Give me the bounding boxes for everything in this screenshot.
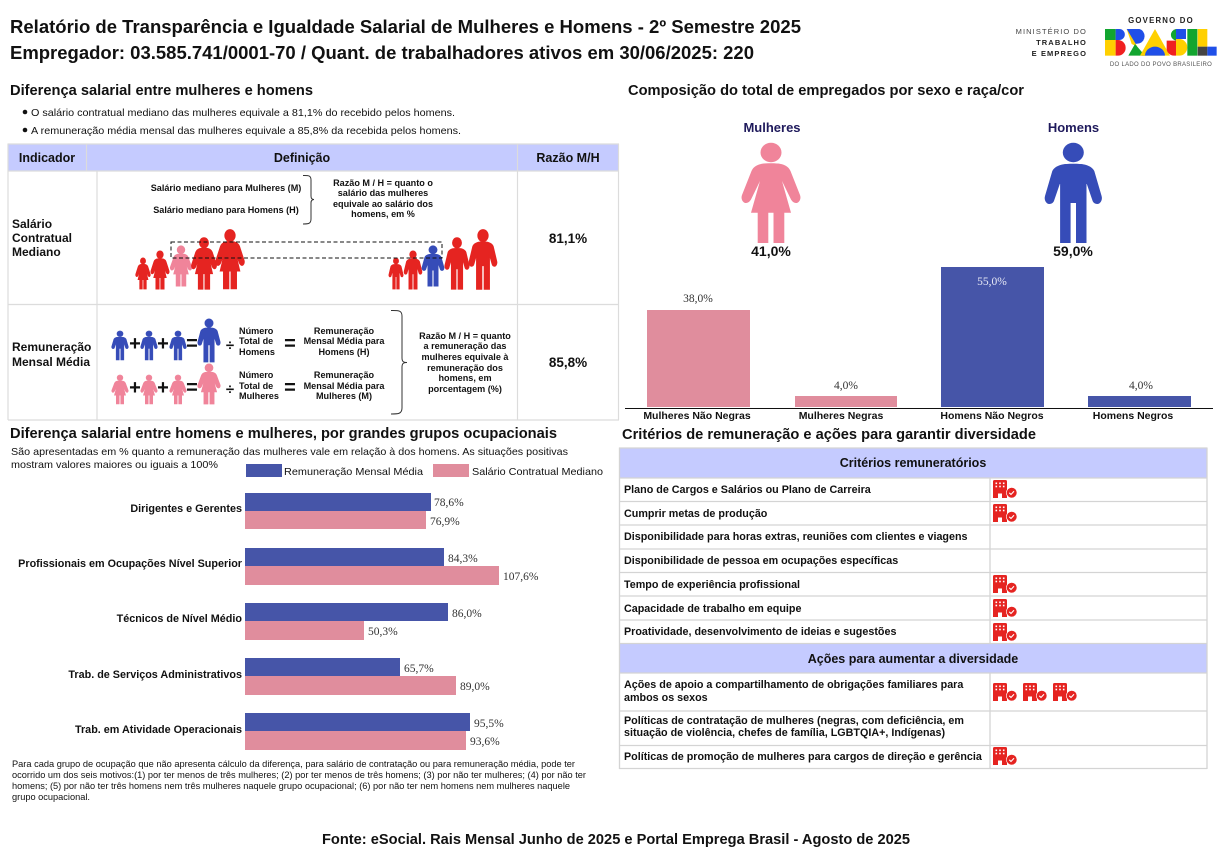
icons: company adopts criterion — [993, 480, 1077, 765]
formula: average pay for men: Homens — [239, 347, 275, 357]
title: Relatório de Transparência e Igualdade Salarial de Mulheres e Homens - 2º Semestre 2025 — [10, 16, 801, 37]
formula: average pay for women: Mulheres — [239, 391, 279, 401]
formula: average pay for men: = — [186, 333, 198, 355]
logo: Ministério do Trabalho e Emprego: E EMPREGO — [1032, 49, 1087, 58]
formula: average pay for women: Mulheres (M) — [316, 391, 372, 401]
formula: average pay for men: Total de — [239, 336, 273, 346]
bar chart: composição por sexo e raça: 4,0% — [834, 380, 858, 392]
formula: average pay for men: + — [157, 333, 169, 355]
table header: Indicador — [19, 151, 75, 165]
legend: Remuneração Mensal Média — [284, 466, 423, 478]
row label: salário contratual mediano: Salário — [12, 217, 52, 231]
formula: average pay for women: Total de — [239, 381, 273, 391]
bar chart: composição por sexo e raça: Homens Não Negros — [940, 410, 1044, 422]
bracket and explanation: remuneração: Razão M / H = quanto — [419, 331, 511, 341]
bar chart: composição por sexo e raça: Homens Negros — [1093, 410, 1173, 422]
heading: critérios de remuneração: Critérios de remuneração e ações para garantir diversidade — [622, 427, 1036, 443]
footnote: homens; (5) por não ter três homens nem três mulheres naquele grupo ocupacional; (6) por não ter nem homens nem mulheres naquele — [12, 781, 570, 791]
panel: criteria table — [619, 448, 1207, 769]
panel: indicator table — [8, 144, 619, 420]
formula: average pay for women: Remuneração — [314, 370, 375, 380]
definition text: salário mediano: Razão M / H = quanto o — [333, 178, 433, 188]
criteria rows — [624, 484, 968, 638]
formula: average pay for men: Remuneração — [314, 326, 375, 336]
footnote — [12, 759, 586, 802]
table header: Razão M/H — [536, 151, 600, 165]
group: Trab. em Atividade Operacionais: 93,6% — [470, 736, 500, 748]
icon group: women ordered by salary — [136, 230, 244, 289]
group: Dirigentes e Gerentes: 76,9% — [430, 516, 460, 528]
source footer: Fonte: eSocial. Rais Mensal Junho de 2025 e Portal Emprega Brasil - Agosto de 2025 — [322, 832, 910, 848]
bar chart: composição por sexo e raça: 4,0% — [1129, 380, 1153, 392]
formula: average pay for men: = — [284, 333, 296, 355]
bracket and explanation: remuneração: remuneração dos — [427, 363, 503, 373]
heading: composição: Composição do total de empregados por sexo e raça/cor — [628, 83, 1024, 99]
heading: diferença salarial: Diferença salarial entre mulheres e homens — [10, 83, 313, 99]
formula: average pay for women — [112, 364, 385, 404]
bar chart: composição por sexo e raça — [625, 267, 1213, 422]
group: Trab. de Serviços Administrativos: 65,7% — [404, 663, 434, 675]
definition text: salário mediano — [151, 175, 433, 224]
formula: average pay for women: ÷ — [226, 381, 234, 398]
bullet list: key findings: A remuneração média mensal das mulheres equivale a 85,8% da recebida pelos homens. — [31, 125, 461, 137]
bar chart: grupos ocupacionais — [18, 493, 539, 750]
formula: average pay for men: ÷ — [226, 337, 234, 354]
logo: Ministério do Trabalho e Emprego: TRABALHO — [1036, 38, 1087, 47]
logo: Ministério do Trabalho e Emprego: MINISTÉRIO DO — [1016, 27, 1087, 36]
subtitle text: São apresentadas em % quanto a remuneração das mulheres vale em relação à dos homens. As situações positivas — [11, 446, 568, 458]
median dashed box — [171, 242, 442, 258]
group: Trab. de Serviços Administrativos — [68, 658, 490, 695]
formula: average pay for women: Mensal Média para — [304, 381, 385, 391]
group: Trab. em Atividade Operacionais: 95,5% — [474, 718, 504, 730]
formula: average pay for women: + — [157, 377, 169, 399]
criteria rows: Disponibilidade de pessoa em ocupações específicas — [624, 555, 898, 567]
logo: Ministério do Trabalho e Emprego — [1016, 27, 1087, 58]
criteria rows: Plano de Cargos e Salários ou Plano de Carreira — [624, 484, 872, 496]
group: Técnicos de Nível Médio: Técnicos de Nível Médio — [117, 613, 242, 625]
footnote: grupo ocupacional. — [12, 792, 90, 802]
definition text: salário mediano: salário das mulheres — [338, 188, 428, 198]
bracket and explanation: remuneração: mulheres equivale à — [422, 352, 509, 362]
table header: Definição — [274, 151, 330, 165]
section header: ações para aumentar a diversidade: Ações para aumentar a diversidade — [808, 652, 1018, 666]
section header: critérios remuneratórios: Critérios remuneratórios — [840, 456, 986, 470]
pictogram: mulheres 41,0%: Mulheres — [743, 120, 801, 135]
group: Dirigentes e Gerentes — [130, 493, 464, 529]
group: Profissionais em Ocupações Nível Superior — [18, 548, 539, 585]
heading: diferença por grupos ocupacionais: Diferença salarial entre homens e mulheres, por grandes grupos ocupacionais — [10, 426, 557, 442]
subtitle text: mostram valores maiores ou iguais a 100% — [11, 459, 218, 471]
value: 85,8%: 85,8% — [549, 355, 587, 370]
bar chart: composição por sexo e raça: 55,0% — [977, 276, 1007, 288]
pictogram: homens 59,0%: 59,0% — [1053, 243, 1093, 259]
bracket and explanation: remuneração — [391, 310, 511, 414]
title — [10, 16, 801, 63]
formula: average pay for men: Número — [239, 326, 274, 336]
pictogram: mulheres 41,0% — [742, 120, 801, 259]
value: 81,1%: 81,1% — [549, 231, 587, 246]
pictogram: homens 59,0% — [1045, 120, 1102, 259]
criteria rows: Cumprir metas de produção — [624, 508, 768, 520]
definition text: salário mediano: equivale ao salário dos — [333, 199, 433, 209]
criteria rows: Capacidade de trabalho em equipe — [624, 603, 801, 615]
group: Profissionais em Ocupações Nível Superior: 84,3% — [448, 553, 478, 565]
formula: average pay for women: + — [129, 377, 141, 399]
bullet list: key findings — [23, 107, 461, 137]
group: Dirigentes e Gerentes: 78,6% — [434, 497, 464, 509]
definition text: salário mediano: Salário mediano para Homens (H) — [153, 205, 299, 215]
action rows: Políticas de contratação de mulheres (negras, com deficiência, em — [624, 715, 964, 727]
formula: average pay for women: Número — [239, 370, 274, 380]
formula: average pay for men: Mensal Média para — [304, 336, 385, 346]
title: Empregador: 03.585.741/0001-70 / Quant. de trabalhadores ativos em 30/06/2025: 220 — [10, 42, 754, 63]
action rows: Políticas de promoção de mulheres para cargos de direção e gerência — [624, 751, 983, 763]
icon group: men ordered by salary — [389, 230, 497, 289]
pictogram: mulheres 41,0%: 41,0% — [751, 243, 791, 259]
group: Profissionais em Ocupações Nível Superior: 107,6% — [503, 571, 539, 583]
table header — [19, 151, 600, 165]
action rows: Ações de apoio a compartilhamento de obrigações familiares para — [624, 679, 964, 691]
formula: average pay for women: = — [186, 377, 198, 399]
action rows: ambos os sexos — [624, 692, 708, 704]
group: Dirigentes e Gerentes: Dirigentes e Gerentes — [130, 503, 242, 515]
pictogram: homens 59,0%: Homens — [1048, 120, 1099, 135]
bracket and explanation: remuneração: a remuneração das — [424, 341, 506, 351]
group: Profissionais em Ocupações Nível Superior: Profissionais em Ocupações Nível Superior — [18, 558, 243, 570]
footnote: Para cada grupo de ocupação que não apresenta cálculo da diferença, para salário de contratação ou para remuneração média, pode ter — [12, 759, 575, 769]
legend — [246, 464, 603, 478]
subtitle text — [11, 446, 568, 471]
group: Trab. em Atividade Operacionais: Trab. em Atividade Operacionais — [75, 724, 242, 736]
row label: remuneração mensal média — [12, 340, 91, 369]
logo: Governo do Brasil: GOVERNO DO — [1128, 16, 1194, 25]
formula: average pay for men: Homens (H) — [318, 347, 370, 357]
formula: average pay for men — [112, 319, 385, 362]
bullet list: key findings: O salário contratual mediano das mulheres equivale a 81,1% do recebido pelos homens. — [31, 107, 455, 119]
group: Trab. de Serviços Administrativos: 89,0% — [460, 681, 490, 693]
group: Trab. de Serviços Administrativos: Trab. de Serviços Administrativos — [68, 669, 242, 681]
formula: average pay for men: + — [129, 333, 141, 355]
logo: Governo do Brasil — [1105, 16, 1217, 68]
group: Técnicos de Nível Médio: 50,3% — [368, 626, 398, 638]
row label: salário contratual mediano: Mediano — [12, 245, 61, 259]
group: Trab. em Atividade Operacionais — [75, 713, 504, 750]
definition text: salário mediano: Salário mediano para Mulheres (M) — [151, 183, 301, 193]
criteria rows: Disponibilidade para horas extras, reuniões com clientes e viagens — [624, 531, 968, 543]
bar chart: composição por sexo e raça: Mulheres Não Negras — [643, 410, 751, 422]
footnote: ocorrido um dos seis motivos:(1) por ter menos de três mulheres; (2) por ter menos de três homens; (3) por não ter mulheres; (4) por não ter — [12, 770, 586, 780]
bar chart: composição por sexo e raça: Mulheres Negras — [799, 410, 883, 422]
logo: Governo do Brasil: DO LADO DO POVO BRASILEIRO — [1110, 62, 1212, 68]
bracket and explanation: remuneração: homens, em — [438, 373, 492, 383]
legend: Salário Contratual Mediano — [472, 466, 603, 478]
row label: salário contratual mediano — [12, 217, 72, 259]
bar chart: composição por sexo e raça: 38,0% — [683, 293, 713, 305]
bracket and explanation: remuneração: porcentagem (%) — [428, 384, 502, 394]
group: Técnicos de Nível Médio — [117, 603, 482, 640]
row label: remuneração mensal média: Remuneração — [12, 340, 91, 354]
row label: salário contratual mediano: Contratual — [12, 231, 72, 245]
group: Técnicos de Nível Médio: 86,0% — [452, 608, 482, 620]
formula: average pay for women: = — [284, 377, 296, 399]
action rows — [624, 679, 983, 763]
row label: remuneração mensal média: Mensal Média — [12, 355, 90, 369]
action rows: situação de violência, chefes de família, LGBTQIA+, Indígenas) — [624, 727, 946, 739]
criteria rows: Tempo de experiência profissional — [624, 579, 800, 591]
criteria rows: Proatividade, desenvolvimento de ideias e sugestões — [624, 626, 896, 638]
definition text: salário mediano: homens, em % — [351, 209, 415, 219]
